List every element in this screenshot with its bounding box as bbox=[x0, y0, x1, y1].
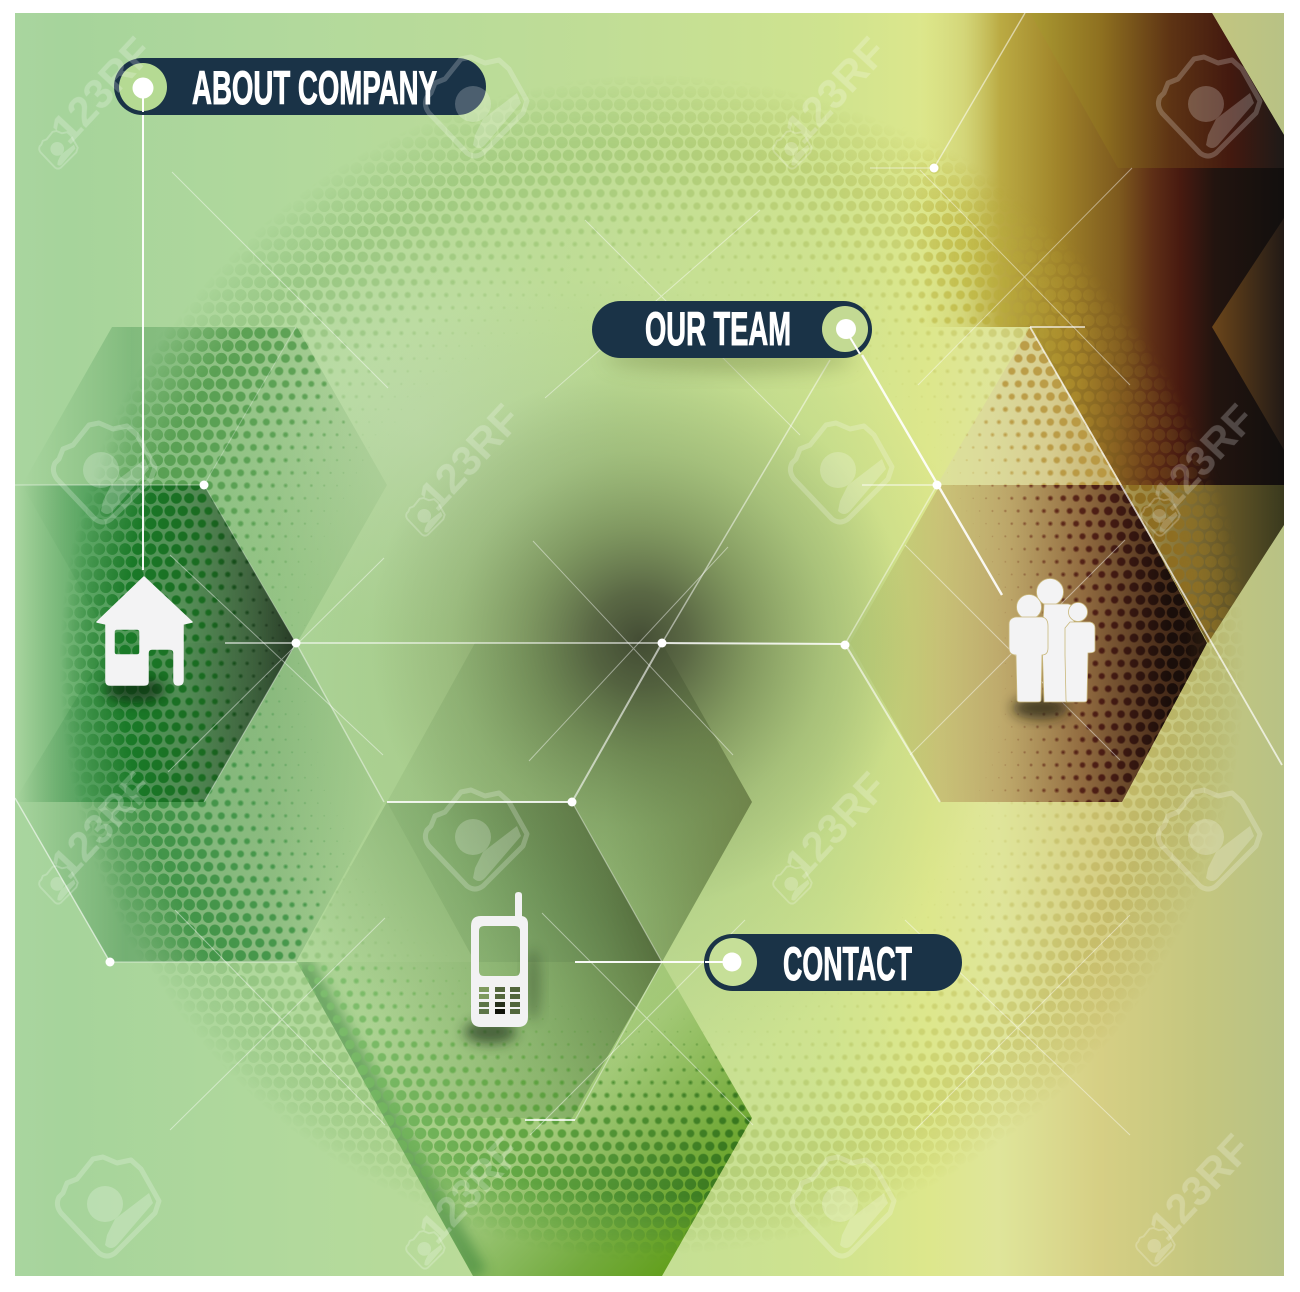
label: contact bbox=[704, 934, 962, 991]
hexagon: upper left bbox=[22, 327, 387, 643]
watermark text: 123RF bbox=[409, 1128, 530, 1252]
icon: house bbox=[97, 577, 192, 703]
hexagon: dark left bbox=[15, 485, 296, 802]
hexagon: phone bbox=[297, 802, 662, 1118]
watermark text: 123RF bbox=[775, 28, 896, 152]
thin diagonal crossing lines bbox=[168, 168, 1132, 1135]
watermark text: 123RF bbox=[409, 395, 530, 519]
top right upper facet bbox=[1084, 13, 1284, 168]
hexagon: lower left bbox=[15, 643, 384, 962]
hexagon: centre bbox=[387, 643, 752, 962]
hexagon bottom edge shadow bbox=[300, 962, 478, 1276]
gold right strip bbox=[1122, 485, 1284, 643]
label: contact: CONTACT bbox=[783, 937, 912, 990]
right notch facet bbox=[1212, 218, 1284, 450]
connector nodes bbox=[106, 164, 942, 966]
icon: team of people bbox=[1009, 578, 1095, 719]
pill shadow: our team bbox=[605, 344, 855, 372]
hexagon: right people bbox=[850, 485, 1207, 802]
watermark text: 123RF bbox=[1139, 1125, 1260, 1249]
watermark text: 123RF bbox=[41, 763, 162, 887]
centre dark glow bbox=[405, 403, 877, 864]
watermark text: 123RF bbox=[41, 28, 162, 152]
top right dark hexagons bbox=[900, 13, 1284, 485]
label: our team: OUR TEAM bbox=[645, 302, 791, 355]
label: our team bbox=[592, 301, 872, 358]
wide dim glow bbox=[316, 372, 920, 984]
hexagon: bottom bbox=[380, 962, 752, 1276]
label: about company bbox=[114, 58, 486, 115]
pale glow bbox=[328, 322, 519, 524]
watermark text: 123RF bbox=[775, 763, 896, 887]
label: about company: ABOUT COMPANY bbox=[192, 61, 437, 114]
watermark text: 123RF bbox=[1143, 395, 1264, 519]
right tan wedge bbox=[937, 327, 1122, 485]
icon: mobile phone bbox=[464, 892, 541, 1044]
